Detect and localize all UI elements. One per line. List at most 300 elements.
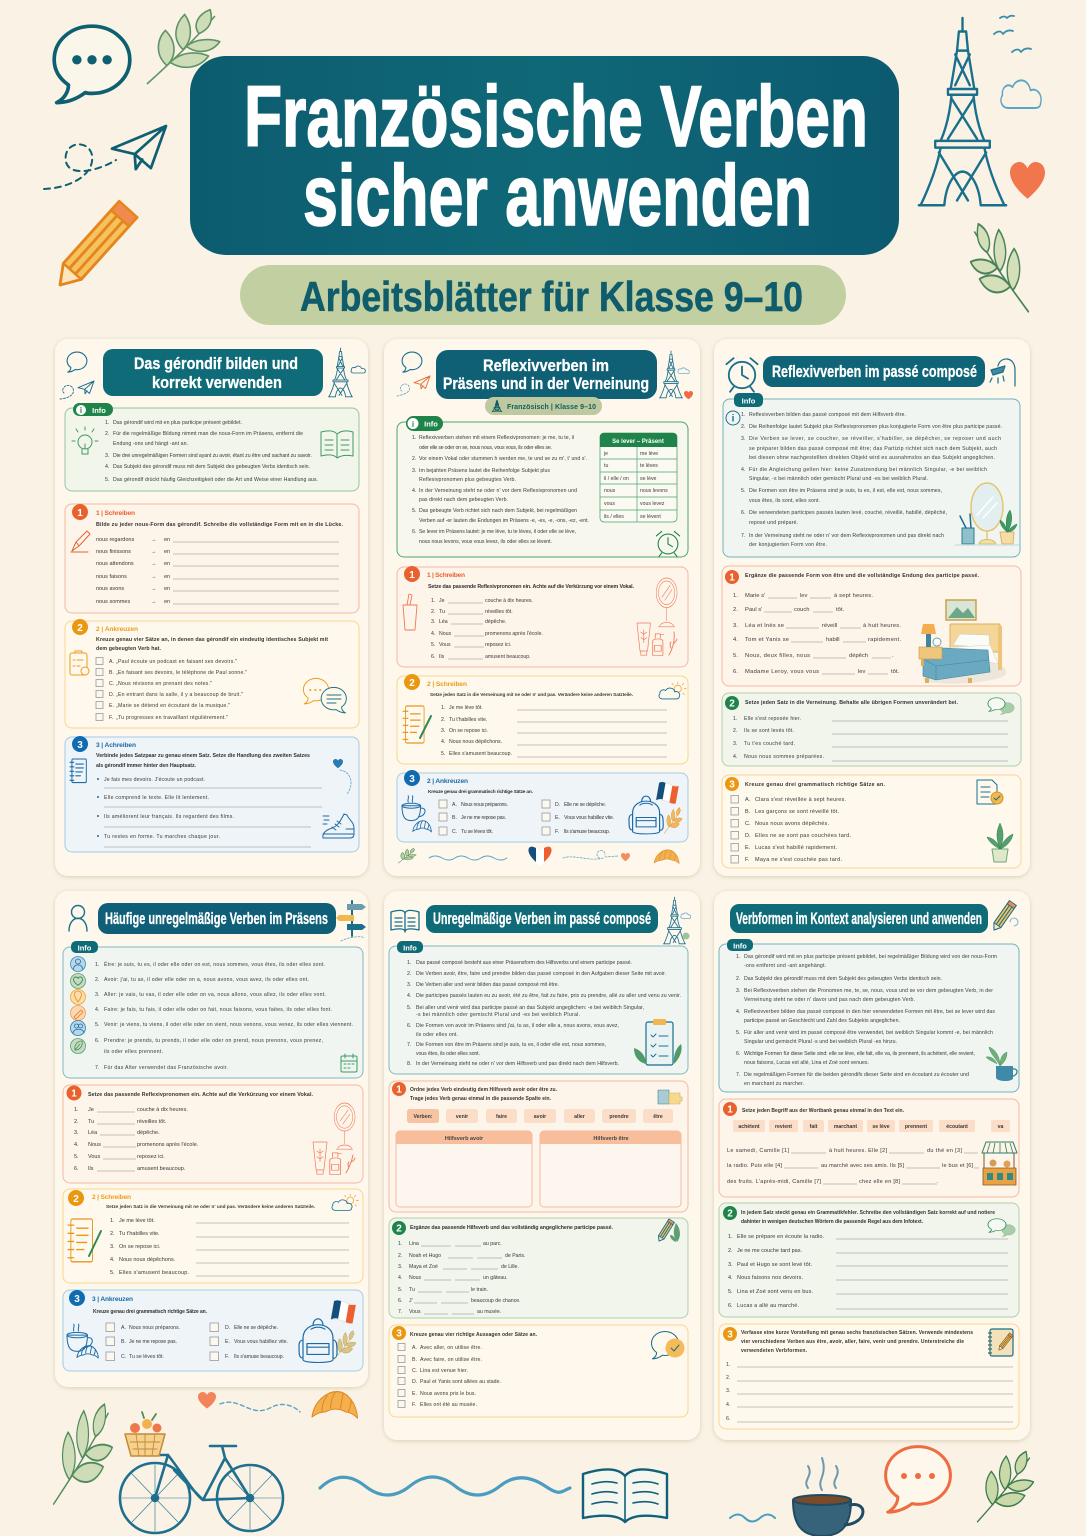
exercise 1: 1 — [727, 1104, 733, 1116]
info list: Die Verben avoir, être, faire und prendre bilden das passé composé in den Aufgaben dieser Seite mit avoir. — [416, 971, 666, 977]
exercise 1 — [63, 1085, 363, 1183]
exercise 2: dem gebeugten Verb hat. — [96, 646, 162, 652]
icon: Eiffel tower — [663, 897, 691, 944]
icon: cloud and sun — [332, 1194, 358, 1210]
exercise 2 — [722, 693, 1021, 766]
exercise 3: Vous vous habillez vite. — [564, 815, 614, 821]
gap text: . — [937, 1179, 939, 1185]
exercise 1: Madame Leroy, vous vous — [745, 669, 819, 675]
icon: notebook and pencil — [988, 1329, 1013, 1356]
exercise 1: réveilles tôt. — [137, 1119, 167, 1125]
exercise 1: nous avons — [96, 586, 124, 592]
exercise 1: promenons après l'école. — [485, 631, 543, 637]
exercise 3: Elle comprend le texte. Elle lit lentement. — [104, 795, 209, 801]
info list: In der Verneinung steht ne oder n' vor dem Hilfsverb und pas direkt nach dem Hilfsverb. — [416, 1061, 619, 1067]
exercise 2: 3. — [733, 741, 737, 747]
exercise 3: Maya ne s'est couchée pas tard. — [755, 857, 842, 863]
verb chips: aller — [574, 1114, 585, 1120]
exercise 3: F. — [225, 1354, 229, 1360]
exercise 3: Avec aller, on utilise être. — [420, 1345, 482, 1351]
icon: notebook and pencil — [68, 1219, 101, 1262]
card icons — [397, 351, 693, 399]
exercise 1: Setze jeden Begriff aus der Wortbank genau einmal in den Text ein. — [742, 1108, 905, 1114]
exercise 2: 5. — [398, 1287, 402, 1293]
exercise 2: J' — [409, 1298, 413, 1304]
exercise 2: 4. — [398, 1275, 402, 1281]
exercise 2: „Tu progresses en travaillant régulièrement." — [116, 715, 228, 721]
exercise 3: Nous nous préparons. — [461, 802, 508, 808]
exercise 2: Lucas a allé au marché. — [737, 1303, 799, 1309]
icon: green sprig right — [971, 224, 1029, 312]
exercise 1: 1 — [396, 1084, 402, 1096]
conjugation table: nous — [604, 488, 616, 494]
conjugation table: se lève — [640, 476, 657, 482]
exercise 2: F. — [109, 715, 113, 721]
exercise 3: C. — [745, 821, 751, 827]
exercise 1: 1. — [431, 598, 435, 604]
exercise 1: Vous — [88, 1154, 100, 1160]
info list: Die drei unregelmäßigen Formen sind ayant zu avoir, étant zu être und sachant zu savoir. — [113, 453, 312, 459]
info list: 5. — [95, 1022, 99, 1028]
info list: Verneinung steht ne oder n' davor und pas nach dem gebeugten Verb. — [744, 997, 915, 1003]
illustration: bicycle with basket — [120, 1412, 283, 1533]
exercise 3: 3 — [396, 1328, 402, 1340]
exercise 1: nous sommes — [96, 599, 130, 605]
info list: Die verwendeten participes passés lauten levé, couché, réveillé, habillé, dépêché, — [749, 510, 947, 516]
info list: 2. — [105, 431, 109, 437]
info list: 5. — [105, 477, 109, 483]
exercise 1: 1 — [729, 572, 735, 584]
info list: Die Formen von avoir im Präsens sind j'ai, tu as, il oder elle a, nous avons, vous avez, — [416, 1023, 619, 1029]
info list: Avoir: j'ai, tu as, il oder elle oder on a, nous avons, vous avez, ils oder elles ont. — [104, 977, 309, 983]
icon: market stall — [982, 1142, 1017, 1185]
word bank: revient — [775, 1124, 792, 1130]
icon: cup with plant — [986, 1047, 1017, 1081]
verb chips: Verben: — [413, 1114, 433, 1120]
exercise 1: Ils — [88, 1166, 94, 1172]
icon: potted plant — [987, 823, 1013, 862]
word bank — [733, 1120, 1010, 1132]
info list — [412, 435, 589, 545]
exercise 1: en — [164, 586, 170, 592]
conjugation table: tu — [604, 463, 608, 469]
exercise 1: 4. — [431, 631, 435, 637]
exercise 3: Kreuze genau drei grammatisch richtige Sätze an. — [428, 789, 533, 795]
info list: 2. — [407, 971, 411, 977]
conjugation table: me lève — [640, 451, 658, 457]
sorting table: Hilfsverb avoir: Hilfsverb avoir — [445, 1136, 484, 1142]
exercise 1: tôt. — [891, 669, 899, 675]
conjugation table: ils / elles — [604, 514, 624, 520]
exercise 3: C. — [412, 1368, 417, 1374]
info list: se préparer bilden das passé composé mit être; das Partizip richtet sich nach dem Subjekt, auch — [749, 446, 997, 452]
exercise 2: 4. — [110, 1257, 115, 1263]
exercise 2: Je me lève tôt. — [449, 705, 483, 711]
info list: 3. — [741, 436, 745, 442]
exercise 1 — [719, 1099, 1019, 1197]
verb chips: avoir — [534, 1114, 546, 1120]
info list: Se lever im Präsens lautet: je me lève, tu te lèves, il oder elle se lève, — [419, 529, 576, 535]
exercise 2: 4. — [733, 754, 737, 760]
exercise 2: Paul et Hugo se sont levé tôt. — [737, 1262, 812, 1268]
exercise 3: B. — [121, 1339, 126, 1345]
icon: speech bubbles — [303, 678, 346, 713]
exercise 2: le train. — [471, 1287, 488, 1293]
exercise 2: Kreuze genau vier Sätze an, in denen das gérondif ein eindeutig identisches Subjekt mit — [96, 637, 328, 643]
exercise 1: couch — [794, 607, 809, 613]
icon: chat bubble top left — [54, 26, 130, 103]
info list: Für das Alter verwendet das Französische avoir. — [104, 1065, 228, 1071]
exercise 1: 3. — [431, 619, 435, 625]
exercise 2: 2 — [396, 1224, 402, 1234]
exercise 1: . — [892, 653, 894, 659]
gap text: Le samedi, Camille [1] — [727, 1148, 789, 1154]
info list: 3. — [407, 982, 411, 988]
exercise 1: 2. — [431, 609, 435, 615]
info list: Das Subjekt des gérondif muss mit dem Subjekt des gebeugten Verbs identisch sein. — [744, 976, 942, 982]
gap text: du thé en [3] — [927, 1148, 962, 1154]
exercise 3: 2 | Ankreuzen — [427, 778, 468, 785]
info list: Das gebeugte Verb richtet sich nach dem Subjekt, bei regelmäßigen — [419, 508, 577, 514]
conjugation table — [600, 433, 677, 522]
exercise 3: als gérondif immer hinter den Hauptsatz. — [96, 763, 197, 769]
exercise 3: D. — [412, 1379, 417, 1385]
exercise 2: B. — [109, 670, 114, 676]
exercise 1: Marie s' — [745, 593, 765, 599]
exercise 1: tôt. — [836, 607, 844, 613]
exercise 2: 3. — [110, 1244, 115, 1250]
info list: Das gérondif wird mit en plus participe présent gebildet, bei regelmäßiger Bildung wird von der nous-Form — [744, 954, 997, 960]
heading — [98, 903, 336, 934]
exercise 1 — [722, 566, 1021, 686]
exercise 1: Paul s' — [745, 607, 762, 613]
icon: notebook and pencil — [403, 706, 431, 743]
info list: 4. — [736, 1009, 740, 1015]
exercise 2: Ergänze das passende Hilfsverb und das vollständig angeglichene participe passé. — [410, 1225, 614, 1231]
exercise 2: 2. — [733, 728, 737, 734]
exercise 2: 2 — [727, 1208, 733, 1220]
info list: Die Formen von être im Präsens sind je suis, tu es, il est, elle est, nous sommes, — [749, 488, 942, 494]
heading: Unregelmäßige Verben im passé composé — [433, 909, 651, 928]
info list: 2. — [741, 424, 745, 430]
info list: Reflexivverben bilden das passé composé in den hier verwendeten Formen mit être, bei se lever wird das — [744, 1009, 995, 1015]
exercise 3: D. — [745, 833, 751, 839]
info list: Wichtige Formen für diese Seite sind: elle se lève, elle fait, elle va, ils prennent, ils achètent, elle revient, — [744, 1051, 975, 1057]
exercise 1: en — [164, 537, 170, 543]
icons: cup, croissant, backpack, flag, sprig — [402, 781, 682, 834]
exercise 3: B. — [452, 815, 457, 821]
exercise 1: 5. — [431, 642, 435, 648]
exercise 1: Je — [439, 598, 445, 604]
exercise 3: A. — [745, 797, 751, 803]
exercise 1: 6. — [74, 1166, 79, 1172]
exercise 2: Elle s'est reposée hier. — [744, 716, 801, 722]
exercise 2 — [719, 1203, 1019, 1317]
info list: 1. — [95, 962, 99, 968]
worksheet card: Häufige unregelmäßige Verben — [55, 891, 368, 1387]
exercise 2: 2 — [409, 678, 415, 689]
subtitle pill — [240, 265, 846, 325]
exercise 2: 2 — [73, 1194, 79, 1205]
exercise 2: 3. — [441, 728, 445, 734]
exercise 3: Verbinde jedes Satzpaar zu genau einem Satz. Setze die Handlung des zweiten Satzes — [96, 753, 310, 759]
info list: Die regelmäßigen Formen für die beiden gérondifs dieser Seite sind en écoutant zu écouter und — [744, 1072, 969, 1078]
exercise 1: → — [151, 599, 156, 605]
exercise 2: 2. — [441, 717, 445, 723]
info list: Aller: je vais, tu vas, il oder elle oder on va, nous allons, vous allez, ils oder elles vont. — [104, 992, 326, 998]
icon: pencil and leaf — [656, 1219, 680, 1243]
exercise 3: A. — [452, 802, 457, 808]
word bank: se lève — [872, 1124, 890, 1130]
icons: bathroom items — [403, 578, 677, 655]
exercise 3: Ils s'amuse beaucoup. — [234, 1354, 284, 1360]
card icons — [60, 348, 365, 399]
bottom decorations — [398, 847, 679, 866]
exercise 1: réveill — [822, 623, 837, 629]
exercise 1: dépêche. — [137, 1130, 160, 1136]
exercise 1: couche à dix heures. — [137, 1107, 188, 1113]
exercise 2: 4. — [441, 739, 445, 745]
info list: 5. — [407, 1005, 411, 1011]
exercise 1: amusent beaucoup. — [485, 654, 531, 660]
worksheet card: Reflexivverben passé composé — [714, 339, 1030, 876]
info list: 2. — [95, 977, 99, 983]
icon: small wave — [730, 1514, 775, 1522]
exercise 3: Kreuze genau drei grammatisch richtige Sätze an. — [745, 782, 886, 788]
info box: Info — [78, 944, 92, 952]
icon: large open book — [583, 1469, 667, 1522]
info box: i — [732, 414, 735, 424]
exercise 2: 2. — [110, 1231, 115, 1237]
exercise 1: Nous — [88, 1142, 101, 1148]
heading: Präsens und in der Verneinung — [443, 374, 649, 393]
exercise 1: habill — [826, 637, 840, 643]
exercise 3: 3 — [729, 780, 735, 790]
exercise 1: à sept heures. — [834, 593, 873, 599]
icons: mirror, tube, bottle, sprig — [313, 1103, 355, 1174]
icon: dashed flight path bottom — [220, 1402, 300, 1412]
icon: orange speech bubble — [886, 1447, 950, 1512]
exercise 2: Nous nous sommes préparées. — [744, 754, 824, 760]
gap text: à huit heures. Elle [2] — [829, 1148, 887, 1154]
info list: Die Verben se lever, se coucher, se réveiller, s'habiller, se dépêcher, se reposer und auch — [749, 436, 1001, 442]
exercise 3: Je ne me repose pas. — [461, 815, 506, 821]
exercise 1: → — [151, 586, 156, 592]
gap text: des fruits. L'après-midi, Camille [7] — [727, 1179, 821, 1185]
title: Französische Verben — [244, 69, 868, 165]
exercise 2: Setze jeden Satz in die Verneinung. Behalte alle übrigen Formen unverändert bei. — [745, 700, 959, 706]
title — [244, 69, 868, 244]
info list: bei diesen ohne nachgestellten direkten Objekt wird es ausnahmslos an das Subjekt angeglichen. — [749, 455, 995, 461]
icon: running shoe — [323, 814, 354, 838]
info box — [389, 941, 688, 1074]
info list — [105, 420, 318, 483]
info box: Info — [92, 406, 106, 415]
exercise 1: 1 — [71, 1088, 77, 1100]
exercise 2: Tu — [409, 1287, 415, 1293]
title panel — [190, 56, 899, 255]
exercise 1: à huit heures. — [863, 623, 901, 629]
sorting table: Hilfsverb être: Hilfsverb être — [593, 1136, 629, 1142]
info list: Die Reihenfolge lautet Subjekt plus Reflexivpronomen plus konjugierte Form von être plus participe passé. — [749, 424, 1002, 430]
info list: Singular, -s bei männlich oder gemischt Plural und -es bei weiblich Plural. — [749, 476, 928, 482]
exercise 1: Trage jedes Verb genau einmal in die passende Spalte ein. — [410, 1096, 552, 1102]
info list: 6. — [736, 1051, 740, 1057]
list icons — [70, 956, 86, 1054]
exercise 2: Je me lève tôt. — [119, 1218, 155, 1224]
exercise 3: 6. — [726, 1416, 730, 1422]
info box — [63, 941, 363, 1078]
exercise 1 — [65, 504, 359, 613]
icon: signpost — [336, 901, 366, 941]
heading: Das gérondif bilden und — [134, 354, 298, 373]
heading: korrekt verwenden — [152, 373, 282, 392]
exercise 1: rapidement. — [868, 637, 901, 643]
exercise 2: beaucoup de chance. — [471, 1298, 521, 1304]
exercise 3: 3 — [727, 1330, 733, 1340]
exercise 2: 2 | Ankreuzen — [96, 626, 138, 633]
exercise 2: au musée. — [477, 1309, 501, 1315]
exercise 3: E. — [555, 815, 560, 821]
exercise 2: Je ne me couche tard pas. — [737, 1248, 802, 1254]
exercise 3 — [397, 770, 688, 842]
exercise 1: dépêch — [849, 653, 868, 659]
heading — [103, 349, 323, 396]
exercise 1: Nous, deux filles, nous — [745, 653, 810, 659]
exercise 2 — [63, 1189, 363, 1283]
exercise 2: 7. — [398, 1309, 402, 1315]
exercise 1: 1. — [733, 593, 738, 599]
info list: Im bejahten Präsens lautet die Reihenfolge Subjekt plus — [419, 468, 550, 474]
exercise 1: en — [164, 574, 170, 580]
exercise 3: F. — [555, 829, 559, 835]
icon: Eiffel tower top right — [919, 18, 1006, 205]
info list: oder elle se oder on se, nous nous, vous vous, ils oder elles se. — [419, 445, 552, 451]
exercise 1: Ordne jedes Verb eindeutig dem Hilfsverb avoir oder être zu. — [410, 1087, 558, 1093]
info list: 6. — [95, 1038, 99, 1044]
info list: Für aller und venir wird im passé composé être verwendet, bei weiblich Singular kommt -e, bei männlich — [744, 1030, 993, 1036]
exercise 3: Kreuze genau vier richtige Aussagen oder Sätze an. — [410, 1332, 538, 1338]
heading — [763, 356, 985, 387]
conjugation table: se lèvent — [640, 514, 661, 520]
exercise 3: B. — [745, 809, 751, 815]
exercise 1: Ils — [439, 654, 445, 660]
word bank: écoutant — [946, 1124, 968, 1130]
exercise 3: 3. — [726, 1388, 730, 1394]
exercise 1: 2. — [733, 607, 738, 613]
exercise 1: Léa — [439, 619, 448, 625]
worksheet card: Unregelmäßige Verben passé composé — [384, 891, 700, 1440]
info list: Singular und gemischt Plural -s und bei weiblich Plural -es hinzu. — [744, 1039, 897, 1045]
exercise 3: Tu restes en forme. Tu marches chaque jour. — [104, 834, 220, 840]
exercise 1: Tu — [88, 1119, 94, 1125]
exercise 1: 1. — [74, 1107, 79, 1113]
info list: reposé und préparé. — [749, 520, 798, 526]
exercise 1: nous attendons — [96, 561, 134, 567]
worksheet card: Das gérondif — [55, 339, 368, 876]
info list: In der Verneinung steht ne oder n' vor dem Reflexivpronomen und pas direkt nach — [749, 533, 944, 539]
exercise 3 — [63, 1290, 363, 1371]
verb chips — [407, 1109, 673, 1123]
exercise 1: Tom et Yanis se — [745, 637, 789, 643]
sorting table: Hilfsverb avoir — [396, 1131, 532, 1207]
exercise 1: nous faisons — [96, 574, 127, 580]
exercise 2: Elles s'amusent beaucoup. — [119, 1270, 189, 1276]
exercise 2: 1. — [733, 716, 737, 722]
info list: In der Verneinung steht ne oder n' vor dem Reflexivpronomen und — [419, 488, 577, 494]
exercise 1: 1 — [409, 570, 415, 581]
info list: Reflexivpronomen plus gebeugtes Verb. — [419, 477, 516, 483]
exercise 1: reposez ici. — [485, 642, 511, 648]
icon: puzzle — [658, 1090, 682, 1104]
info list: Verben auf -er lauten die Endungen im Präsens -e, -es, -e, -ons, -ez, -ent. — [419, 518, 589, 524]
exercise 1: → — [151, 574, 156, 580]
info list: 7. — [741, 533, 745, 539]
icon: clipboard and leaves — [634, 1019, 682, 1065]
exercise 2: 3. — [728, 1262, 733, 1268]
info box: i — [80, 406, 82, 415]
exercise 3: Tu se lèves tôt. — [461, 829, 493, 835]
exercise 2: 2 — [729, 698, 735, 710]
icon: notepad — [70, 759, 86, 783]
exercise 1: 3. — [733, 623, 738, 629]
exercise 3: 3 | Ankreuzen — [92, 1296, 133, 1303]
exercise 2: Nous — [409, 1275, 422, 1281]
exercise 1: 6. — [431, 654, 435, 660]
exercise 1: nous regardons — [96, 537, 134, 543]
exercise 2 — [397, 674, 688, 764]
sorting table: Hilfsverb être — [540, 1131, 681, 1207]
exercise 1: Tu — [439, 609, 445, 615]
exercise 2: dahinter in wenigen deutschen Wörtern die passende Regel aus dem Infotext. — [741, 1219, 924, 1225]
exercise 3 — [65, 736, 359, 852]
exercise 3: 3 — [77, 740, 83, 751]
info list: 2. — [736, 976, 740, 982]
exercise 1: Je — [88, 1107, 94, 1113]
info list: 6. — [407, 1023, 411, 1029]
icon: birds — [994, 16, 1031, 52]
exercise 3: Vous vous habillez vite. — [234, 1339, 288, 1345]
exercise 1: Vous — [439, 642, 451, 648]
icon: clipboard — [70, 651, 89, 675]
exercise 2: Maya et Zoé — [409, 1264, 438, 1270]
info list: Das passé composé besteht aus einer Präsensform des Hilfsverbs und einem participe passé. — [416, 960, 632, 966]
exercise 1: lev — [858, 669, 866, 675]
info list: 3. — [105, 453, 109, 459]
info list: 1. — [105, 420, 109, 426]
exercise 2: de Paris. — [505, 1253, 525, 1259]
exercise 3: 3 | Achreiben — [96, 742, 136, 749]
exercise 2: 1. — [398, 1241, 402, 1247]
exercise 3: E. — [412, 1391, 417, 1397]
exercise 1: 6. — [733, 669, 738, 675]
info list: Die Formen von être im Präsens sind je suis, tu es, il oder elle est, nous sommes, — [416, 1042, 606, 1048]
icon: checked document — [977, 780, 1003, 804]
info list: 4. — [105, 464, 109, 470]
icon: shower — [990, 359, 1015, 386]
icon: coffee cup with steam — [793, 1458, 863, 1536]
exercise 3: vier verschiedene Verben aus être, avoir, aller, faire, venir und prendre. Unterstreiche die — [741, 1339, 964, 1345]
exercise 3: 2. — [726, 1375, 730, 1381]
verb chips: faire — [496, 1114, 507, 1120]
icon: speech bubbles — [988, 1219, 1015, 1236]
icon: large croissant — [312, 1392, 358, 1418]
gap text: au marché avec ses amis. Ils [5] — [821, 1163, 904, 1169]
exercise 2: „En faisant ses devoirs, le téléphone de Paul sonne." — [116, 670, 247, 676]
exercise 1: lev — [800, 593, 808, 599]
exercise 2: Nous faisons nos devoirs. — [737, 1275, 803, 1281]
gap text: le bus et [6] — [942, 1163, 973, 1169]
